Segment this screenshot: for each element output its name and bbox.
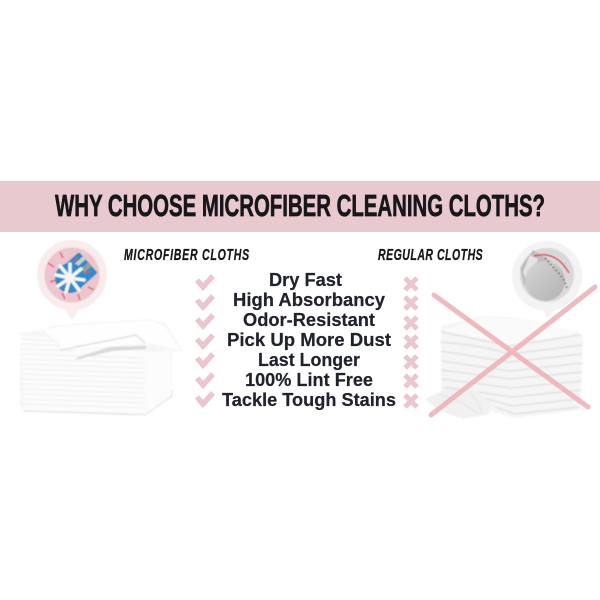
feature list: [222, 270, 396, 410]
feature list: Odor-Resistant: [243, 310, 375, 330]
icon: microfiber cross-section callout: [37, 240, 107, 320]
feature list: Pick Up More Dust: [227, 330, 391, 350]
feature list: Tackle Tough Stains: [222, 390, 396, 410]
feature list: 100% Lint Free: [245, 370, 373, 390]
heading: microfiber cloths: MICROFIBER CLOTHS: [124, 246, 249, 264]
feature list: Last Longer: [258, 350, 360, 370]
title band: [0, 181, 600, 232]
cross marks: [405, 278, 417, 407]
illustration: microfiber towel stack: [20, 320, 182, 415]
icon: regular cloth fiber callout: [512, 241, 582, 319]
illustration: regular towel stack: [425, 316, 583, 419]
heading: regular cloths: REGULAR CLOTHS: [378, 246, 483, 264]
red cross over regular cloths: [431, 287, 595, 415]
feature list: Dry Fast: [269, 270, 342, 290]
feature list: High Absorbancy: [233, 290, 385, 310]
check marks: [197, 276, 213, 404]
